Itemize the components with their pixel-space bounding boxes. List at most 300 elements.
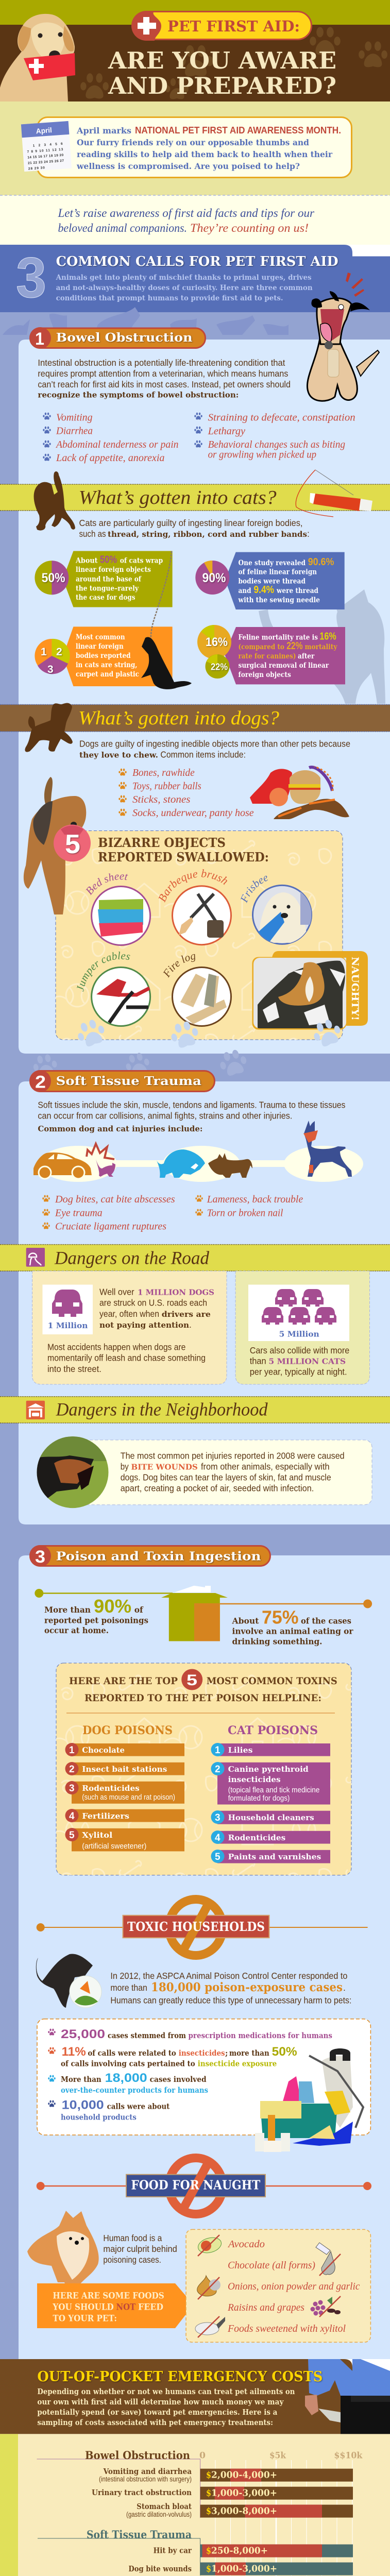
paw prints on blue band (74, 1017, 344, 1050)
list: cat poisons: (topical flea and tick medicine (228, 1786, 319, 1794)
list: cat poisons: 3 (215, 1812, 221, 1823)
card: forbidden foods: Onions, onion powder and garlic (228, 2281, 360, 2292)
callout arrow: foods not to feed: TO YOUR PET: (53, 2313, 117, 2324)
list: cat poisons: formulated for dogs) (228, 1794, 290, 1803)
banner: what's gotten into cats (0, 470, 390, 531)
poison exposure text: Humans can greatly reduce this type of unnecessary harm to pets: (110, 1995, 351, 2005)
section header: 3 common calls (0, 245, 390, 312)
panel: top 5 toxins (56, 1663, 351, 1875)
icon: thread spool and needle (296, 470, 372, 517)
injuries list: Eye trauma (55, 1208, 103, 1219)
stat: 18,000: over-the-counter products for humans (61, 2086, 208, 2095)
card text: not paying attention (99, 1320, 189, 1330)
header banner (0, 0, 390, 101)
stat: 11 percent: 50% (272, 2045, 297, 2059)
heading: toxic households: TOXIC HOUSEHOLDS (127, 1919, 265, 1934)
stat card: string, carpet, plastic: 3 (47, 664, 54, 675)
stat card: mortality rates: 16% (206, 635, 228, 649)
chart group: bowel obstruction: $ (206, 2487, 211, 2498)
dogs intro text: they love to chew. (79, 751, 158, 760)
card text: The most common pet injuries reported in 2008 were caused (121, 1451, 345, 1461)
stat: 18,000: 18,000 (105, 2071, 147, 2085)
icon: calendar: 14 15 16 17 18 19 20 (27, 154, 64, 160)
section heading: bowel obstruction (29, 327, 205, 349)
stat: 90 percent at home: of (134, 1605, 144, 1615)
list: dog poisons: Chocolate (82, 1745, 125, 1755)
stat card: 50 percent: around the base of (76, 575, 142, 583)
list: cat poisons: insecticides (228, 1775, 281, 1784)
card: toxic household stats (37, 2019, 370, 2152)
card: forbidden foods: Raisins and grapes (227, 2302, 304, 2313)
section heading: bowel obstruction: 1 (35, 329, 44, 349)
card text: . (189, 1319, 192, 1330)
dogs intro text: Dogs are guilty of ingesting inedible objects more than other pets because (79, 739, 350, 749)
stat card: 50 percent (35, 551, 173, 607)
icon: onion and garlic (197, 2276, 221, 2299)
card text: by (121, 1462, 129, 1472)
card: forbidden foods (186, 2229, 370, 2342)
object: bed sheet (86, 873, 151, 946)
heading: food for naught (37, 2158, 371, 2214)
stat card: mortality rates: (compared to (238, 643, 284, 651)
cats intro text (79, 518, 310, 539)
stat: 11 percent (48, 2045, 297, 2068)
card: forbidden foods: Avocado (227, 2239, 265, 2250)
poison exposure text: 180,000 poison-exposure cases (151, 1980, 343, 1994)
photo: pomeranian (27, 2211, 99, 2289)
section heading: poison and toxin (29, 1545, 270, 1567)
stat: 18,000 (48, 2071, 208, 2095)
icon: calendar: 28 29 30 (28, 166, 45, 171)
axis labels and grid (199, 2450, 363, 2576)
banner: dangers in the neighborhood: Dangers in the Neighborhood (56, 1399, 268, 1419)
stat card: 50 percent: linear foreign objects (76, 566, 151, 574)
text: human food culprit (103, 2233, 177, 2265)
injuries list (42, 1194, 303, 1232)
bowel obstruction text: can’t reach for first aid kits in most cases. Instead, pet owners should (38, 379, 291, 389)
intro text: April marks (76, 126, 131, 135)
object: fire log: Fire log (163, 954, 195, 978)
stat: 25,000 (48, 2027, 332, 2041)
poison exposure text (110, 1971, 351, 2005)
chart group: soft tissue trauma: Soft Tissue Trauma (87, 2528, 192, 2541)
symptom list: Lethargy (208, 426, 245, 437)
stat card: mortality rates: 22% (286, 640, 303, 652)
icon: garage (26, 1401, 45, 1419)
icon: collision burst (87, 1144, 114, 1159)
section intro (37, 2387, 295, 2427)
stat card: 90 percent (195, 552, 345, 609)
stat: 75 percent eating or drinking: About (231, 1616, 259, 1625)
list: dog poisons: Fertilizers (82, 1811, 129, 1821)
card: one million dogs: 1 Million (48, 1321, 88, 1330)
panel: poison and toxin (19, 1555, 390, 2359)
heading: REPORTED TO THE PET POISON HELPLINE: (84, 1693, 321, 1704)
icon: calendar: 7 8 9 10 11 12 13 (27, 148, 63, 154)
common items list: Sticks, stones (132, 794, 191, 805)
heading (98, 835, 269, 865)
stat: 75 percent eating or drinking: 75% (262, 1606, 299, 1628)
chart group: bowel obstruction: Stomach bloat (137, 2502, 192, 2511)
stat: 11 percent: of calls involving cats pertained to (61, 2060, 195, 2068)
callout arrow: foods not to feed: FEED (138, 2302, 163, 2313)
intro text: wellness is compromised. Are you poised to help? (76, 161, 300, 171)
stat: 75 percent eating or drinking: drinking something. (232, 1636, 323, 1646)
stat card: 50 percent: of cats wrap (120, 557, 163, 565)
stat: 18,000: More than (61, 2075, 101, 2084)
section title: OUT-OF-POCKET EMERGENCY COSTS (37, 2369, 323, 2385)
list: cat poisons: Lilies (228, 1745, 252, 1755)
poison exposure text: . (343, 1982, 346, 1993)
main title: AND PREPARED? (108, 72, 336, 99)
card text: per year, typically at night. (250, 1367, 347, 1377)
text: human food culprit: Human food is a (103, 2233, 162, 2243)
poison exposure text: In 2012, the ASPCA Animal Poison Control Center responded to (110, 1971, 347, 1981)
card: five million cats (235, 1271, 370, 1384)
list: cat poisons: Canine pyrethroid (228, 1765, 309, 1774)
section heading: poison and toxin: 3 (35, 1547, 45, 1567)
chart group: soft tissue trauma: Hit by car (154, 2546, 192, 2555)
injuries list: Dog bites, cat bite abscesses (55, 1194, 175, 1205)
icon: calendar (21, 121, 72, 172)
list: cat poisons: 1 (215, 1745, 221, 1756)
icon: dog silhouette (25, 703, 73, 752)
section heading: bowel obstruction: Bowel Obstruction (56, 331, 193, 345)
poison exposure text: more than (110, 1982, 147, 1993)
section header: out-of-pocket emergency costs (0, 2359, 390, 2434)
stat card: mortality rates: 16% (319, 631, 336, 642)
object: fire log (163, 954, 232, 1027)
text: human food culprit: poisoning cases. (103, 2255, 161, 2265)
card text: Most accidents happen when dogs are (47, 1342, 185, 1352)
stat: 90 percent at home (44, 1596, 148, 1635)
stat: 25,000: cases stemmed from (108, 2031, 186, 2040)
awareness tagline: Let’s raise awareness of first aid facts and tips for our (57, 207, 315, 219)
stat card: mortality rates: mortality (305, 643, 337, 651)
chart group: bowel obstruction (37, 2449, 353, 2518)
dogs intro text (79, 739, 350, 760)
banner: what's gotten into dogs (0, 703, 390, 752)
list: dog poisons: 1 (69, 1745, 75, 1756)
list: dog poisons: DOG POISONS (82, 1724, 173, 1737)
stat: 11 percent: insecticides (179, 2049, 225, 2058)
icon: golden retriever holding first aid kit (0, 14, 75, 101)
callout arrow: foods not to feed: NOT (116, 2302, 136, 2313)
common items list: Bones, rawhide (132, 767, 195, 778)
photo: household chemicals (255, 2048, 363, 2152)
photo card: naughty (252, 951, 368, 1029)
icon: cat (96, 1159, 115, 1177)
list: cat poisons (211, 1724, 330, 1863)
stat card: string, carpet, plastic: 2 (56, 646, 62, 658)
card: bite wounds (36, 1435, 372, 1508)
stat card: 50 percent: About (75, 557, 98, 565)
soft tissue text (38, 1099, 346, 1133)
icon: calendar: 21 22 23 24 25 26 27 (28, 159, 64, 165)
list: cat poisons: 5 (215, 1852, 221, 1862)
stat card: mortality rates: foreign objects (238, 671, 291, 679)
card text: drivers are (162, 1310, 211, 1319)
stat: 10,000: 10,000 (62, 2098, 104, 2112)
list: dog poisons (65, 1724, 184, 1851)
symptom list: Lack of appetite, anorexia (56, 452, 165, 464)
stat card: 50 percent: the case for dogs (76, 594, 135, 602)
photo: dog toys (250, 767, 349, 819)
banner: dangers on the road (0, 1245, 390, 1271)
common items list (118, 767, 254, 819)
stat card: 50 percent: 50% (42, 571, 65, 585)
stat: 25,000: prescription medications for humans (189, 2031, 332, 2040)
chart group: bowel obstruction: 3,000-8,000+ (211, 2505, 277, 2516)
cats intro text: : (307, 529, 310, 539)
card text: Well over (99, 1287, 134, 1297)
chart group: bowel obstruction: 1,000-3,000+ (211, 2487, 277, 2498)
card text: are struck on U.S. roads each (99, 1298, 207, 1308)
icon: xylitol spoon (195, 2316, 225, 2337)
stat: 75 percent eating or drinking: of the cases (301, 1616, 351, 1625)
heading: BIZARRE OBJECTS (98, 835, 226, 850)
section intro: and not-always-healthy doses of curiosity. Here are three common (56, 284, 313, 292)
chart group: bowel obstruction: Bowel Obstruction (85, 2449, 190, 2462)
section intro: our own with first aid will determine how much money we may (37, 2398, 284, 2406)
stat card: mortality rates: rate for canines) (238, 652, 296, 660)
chart group: bowel obstruction: (gastric dilation-volvulus) (126, 2511, 192, 2518)
awareness tagline: beloved animal companions. (58, 222, 187, 234)
silhouette: large cat background (259, 589, 385, 704)
card text: dogs. Dog bites can tear the layers of skin, fat and muscle (121, 1472, 331, 1483)
banner: what's gotten into cats: What’s gotten into cats? (79, 487, 277, 509)
card text: into the street. (47, 1364, 101, 1374)
stat card: string, carpet, plastic: carpet and plastic (76, 670, 139, 679)
photo: kitten and fish bowl (36, 1954, 101, 2008)
chart group: bowel obstruction: 2,000-4,000+ (211, 2469, 277, 2480)
section intro: Depending on whether or not we humans can treat pet ailments on (37, 2387, 295, 2396)
card text: than (250, 1356, 266, 1366)
icon: raisins and grapes (310, 2296, 341, 2317)
panel: soft tissue trauma (19, 1081, 390, 1524)
section intro: Animals get into plenty of mischief thanks to primal urges, drives (56, 274, 312, 282)
symptom list: or growling when picked up (208, 449, 316, 461)
injuries list: Lameness, back trouble (207, 1194, 303, 1205)
list: dog poisons: (such as mouse and rat poison) (82, 1793, 175, 1802)
stat card: mortality rates (197, 625, 345, 684)
chart group: bowel obstruction: Urinary tract obstruction (92, 2488, 192, 2497)
first aid pill badge: PET FIRST AID: (167, 18, 300, 35)
main title: ARE YOU AWARE (108, 47, 336, 74)
stat: 11 percent: insecticide exposure (198, 2060, 277, 2068)
animal silhouettes strip (3, 307, 289, 335)
stat card: 90 percent: 90% (202, 571, 226, 585)
chart group: soft tissue trauma: 250-8,000+ (211, 2546, 268, 2556)
stat card: string, carpet, plastic: in cats are string, (76, 661, 137, 669)
stat: 90 percent at home: reported pet poisonings (44, 1616, 148, 1625)
panel: cost chart (0, 2434, 390, 2576)
stat card: string, carpet, plastic: bodies reported (76, 652, 131, 660)
heading: MOST COMMON TOXINS (207, 1676, 337, 1687)
list: dog poisons: (artificial sweetener) (82, 1842, 146, 1851)
card text: momentarily off leash and chase something (47, 1353, 206, 1363)
card: five million cats: 5 Million (279, 1329, 319, 1338)
photo: snarling dog (36, 1435, 109, 1508)
chart group: bowel obstruction: (intestinal obstruction with surgery) (99, 2476, 192, 2483)
main title (108, 47, 336, 99)
common items list: Socks, underwear, panty hose (132, 807, 254, 819)
stat: 10,000: household products (61, 2113, 137, 2122)
section intro (56, 274, 313, 302)
heading (69, 1669, 337, 1704)
intro text: Our furry friends rely on our opposable thumbs and (77, 138, 309, 147)
photo: airedale with frisbee number: 5 (65, 829, 80, 859)
stat card: 90 percent: 90.6% (308, 556, 334, 568)
card: forbidden foods: Foods sweetened with xylitol (227, 2323, 346, 2334)
callout arrow: foods not to feed (37, 2283, 194, 2328)
bowel obstruction text (38, 358, 291, 400)
heading: REPORTED SWALLOWED: (98, 850, 269, 865)
object: frisbee: Frisbee (241, 876, 268, 903)
object: jumper cables (77, 952, 151, 1027)
list: dog poisons: Xylitol (82, 1831, 113, 1840)
illustration: cartoon dog swallowed remote (307, 273, 379, 401)
list: dog poisons: 5 (69, 1830, 75, 1841)
stat card: string, carpet, plastic: linear foreign (76, 642, 124, 651)
panel: bowel and what's gotten in (19, 340, 390, 1054)
icon: calendar: 1 2 3 4 5 6 (33, 142, 63, 148)
icon: calendar: April (36, 126, 52, 135)
icon: road (26, 1248, 45, 1267)
stat: 75 percent eating or drinking (231, 1606, 353, 1646)
stat card: string, carpet, plastic: Most common (76, 633, 125, 641)
photo: airedale with frisbee number (24, 777, 91, 914)
icon: doberman with cone (303, 1121, 352, 1177)
black cat playing (141, 637, 192, 689)
list: cat poisons: Rodenticides (228, 1833, 285, 1842)
card: one million dogs (32, 1271, 227, 1384)
card text (121, 1451, 345, 1494)
stat card: 90 percent: and (238, 587, 251, 595)
text: human food culprit: major culprit behind (103, 2244, 177, 2254)
callout arrow: foods not to feed: HERE ARE SOME FOODS (53, 2291, 164, 2301)
symptom list: Behavioral changes such as biting (208, 439, 345, 450)
stat: 11 percent: of calls were related to (88, 2049, 176, 2058)
section heading: soft tissue trauma: 2 (35, 1073, 46, 1092)
awareness tagline: They’re counting on us! (190, 222, 309, 234)
panel: intro (0, 101, 390, 195)
heading: HERE ARE THE TOP (69, 1676, 178, 1687)
section intro: sampling of costs associated with pet emergency treatments: (37, 2418, 273, 2427)
symptom list: Vomiting (56, 412, 93, 423)
stat card: 90 percent: with the sewing needle (238, 596, 320, 604)
cats intro text: thread, string, ribbon, cord and rubber bands (108, 530, 307, 539)
icon: car (33, 1153, 92, 1179)
chart group: bowel obstruction: Vomiting and diarrhea (103, 2467, 192, 2476)
section heading: soft tissue trauma: Soft Tissue Trauma (56, 1074, 201, 1088)
icon: car (52, 1290, 82, 1317)
stat card: 90 percent: bodies were thread (238, 578, 306, 586)
stat card: mortality rates: Feline mortality rate is (238, 634, 318, 642)
list: cat poisons: 4 (215, 1833, 221, 1843)
card: forbidden foods: Chocolate (all forms) (228, 2260, 315, 2271)
card text: year, often when (99, 1309, 159, 1319)
chart group: soft tissue trauma: Dog bite wounds (128, 2564, 192, 2573)
injuries list: Cruciate ligament ruptures (55, 1221, 166, 1232)
stat card: string, carpet, plastic: 1 (41, 646, 47, 658)
heading: toxic households (37, 1899, 368, 1956)
stat card: mortality rates: surgical removal of linear (238, 662, 329, 670)
card text: apart, creating a pocket of air, seeded with infection. (121, 1483, 314, 1494)
list: dog poisons: Insect bait stations (82, 1765, 167, 1774)
object: bed sheet: Bed sheet (86, 873, 128, 895)
heading: food for naught: FOOD FOR NAUGHT (131, 2178, 261, 2193)
card text: BITE WOUNDS (131, 1463, 198, 1472)
stat card: 90 percent: were thread (276, 587, 318, 595)
panel: bizarre objects (56, 831, 368, 1040)
chart group: soft tissue trauma (38, 2528, 353, 2575)
stat: 11 percent: more than (229, 2049, 269, 2058)
page background columns (0, 312, 390, 2359)
heading: 5 (186, 1672, 197, 1689)
callout arrow: foods not to feed: YOU SHOULD (53, 2302, 114, 2313)
stat: 18,000: cases involved (150, 2075, 207, 2084)
chart group: soft tissue trauma: 1,000-3,000+ (211, 2564, 277, 2574)
injuries list: Torn or broken nail (207, 1208, 283, 1219)
object: barbeque brush: Barbeque brush (159, 869, 227, 903)
dogs intro text: Common items include: (160, 750, 246, 760)
list: dog poisons: Rodenticides (82, 1784, 140, 1793)
string toy (151, 551, 172, 641)
first aid pill badge (131, 11, 311, 41)
object: jumper cables: Jumper cables (77, 952, 130, 992)
bowel obstruction text: Intestinal obstruction is a potentially life-threatening condition that (38, 358, 285, 368)
illustration: common injuries (33, 1121, 363, 1182)
card text: from other animals, especially with (201, 1462, 330, 1472)
stat card: 90 percent: 9.4% (253, 584, 274, 596)
banner: dangers on the road: Dangers on the Road (54, 1248, 210, 1268)
soft tissue text: Common dog and cat injuries include: (38, 1124, 202, 1133)
icon: cat silhouette (34, 471, 75, 531)
banner: dangers in the neighborhood (0, 1397, 390, 1423)
stat card: 50 percent: the tongue–rarely (76, 584, 139, 592)
stat: 90 percent at home: 90% (94, 1596, 131, 1617)
symptom list (43, 412, 355, 464)
section intro: potentially spend (or save) toward pet emergencies. Here is a (37, 2408, 278, 2417)
intro text (76, 125, 341, 171)
list: dog poisons: 4 (69, 1811, 75, 1822)
chart group: soft tissue trauma: $ (206, 2546, 211, 2556)
stat card: 90 percent: of feline linear foreign (238, 568, 317, 577)
bowel obstruction text: requires prompt attention from a veterinarian, which means humans (38, 368, 289, 379)
object: frisbee (241, 876, 312, 945)
section heading: soft tissue trauma (29, 1070, 214, 1092)
list: cat poisons: CAT POISONS (228, 1724, 318, 1737)
soft tissue text: can occur from car collisions, animal fights, strains and other injuries. (38, 1111, 292, 1121)
number 3: 3 (16, 246, 46, 310)
banner: what's gotten into dogs: What’s gotten into dogs? (78, 707, 279, 729)
icon: blue dog (156, 1149, 205, 1178)
icon: chocolate kiss (316, 2243, 341, 2276)
stat card: mortality rates: after (298, 652, 315, 660)
awareness tagline (0, 195, 390, 245)
stat: 25,000: 25,000 (61, 2027, 105, 2041)
stat card: 90 percent: One study revealed (238, 559, 306, 567)
photo card: naughty: NAUGHTY! (349, 957, 361, 1021)
list: cat poisons: Household cleaners (228, 1813, 314, 1822)
card text: Cars also collide with more (250, 1345, 349, 1355)
photo: man with empty pocket (305, 2359, 390, 2434)
stat: 75 percent eating or drinking: involve an animal eating or (232, 1626, 353, 1636)
card text: 1 MILLION DOGS (138, 1288, 214, 1297)
soft tissue text: Soft tissues include the skin, muscle, tendons and ligaments. Trauma to these tissues (38, 1099, 346, 1110)
stat: 90 percent at home: More than (44, 1605, 91, 1615)
